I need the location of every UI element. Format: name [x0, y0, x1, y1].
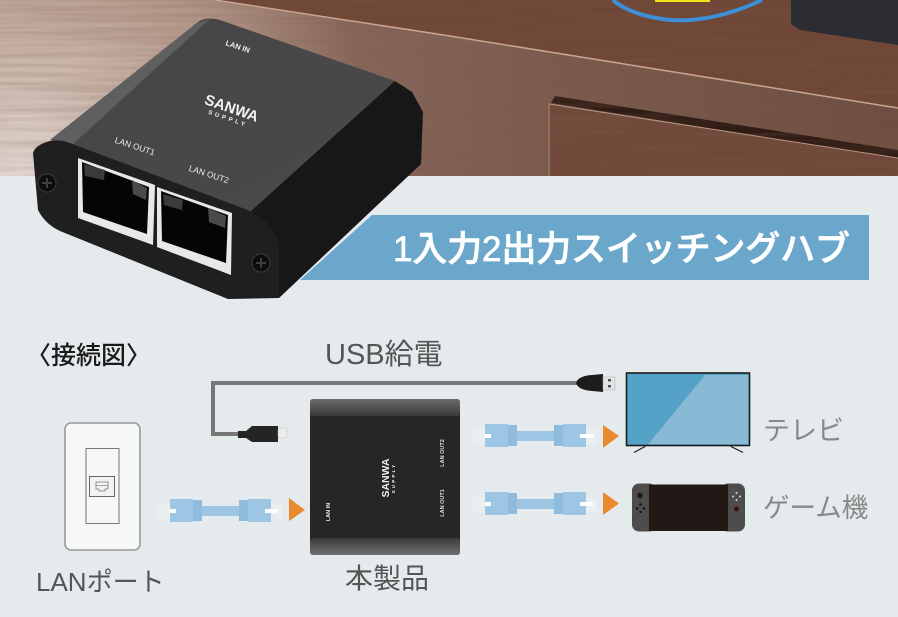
USB power cable — [213, 374, 615, 442]
printed label: LAN OUT1: LAN OUT1 — [440, 489, 446, 517]
icon: game console — [632, 484, 745, 532]
printed logo: SANWA SUPPLY: SUPPLY — [391, 463, 396, 493]
port 2 — [157, 187, 232, 275]
icon: TV — [626, 373, 750, 452]
product photo: switching hub — [33, 19, 423, 299]
printed logo: SANWA SUPPLY: SANWA — [380, 458, 392, 498]
arrow: to game console — [603, 492, 619, 515]
banner — [300, 215, 869, 280]
photo: wooden desk background — [0, 0, 898, 176]
heading: connection diagram: 〈接続図〉 — [26, 342, 151, 370]
arrow: to hub — [289, 498, 305, 521]
printed logo: SANWA SUPPLY: SUPPLY — [207, 110, 248, 129]
port 1 — [78, 158, 155, 245]
label: this product: 本製品 — [345, 563, 429, 594]
printed label: LAN OUT2: LAN OUT2 — [188, 163, 230, 185]
photo: yellow cable — [655, 0, 710, 2]
hub front face — [33, 140, 279, 299]
diagram product: hub top view — [310, 399, 460, 555]
label: TV: テレビ — [763, 416, 844, 446]
LAN cable: hub to TV — [472, 424, 597, 447]
icon: LAN wall port — [65, 423, 140, 550]
arrow: to TV — [603, 425, 619, 448]
printed label: LAN OUT2: LAN OUT2 — [440, 439, 446, 467]
LAN cable: port to hub — [157, 499, 282, 522]
hub top face — [50, 19, 395, 212]
banner title: 1入力2出力スイッチングハブ — [393, 230, 850, 269]
label: game console: ゲーム機 — [763, 493, 868, 523]
photo: black router — [791, 0, 898, 45]
USB-C plug — [238, 426, 287, 442]
hub right side — [246, 81, 423, 298]
printed label: LAN IN: LAN IN — [326, 503, 332, 521]
label: LAN port: LANポート — [36, 567, 165, 597]
screw left — [38, 174, 56, 192]
label: USB power: USB給電 — [325, 338, 443, 371]
printed label: LAN IN: LAN IN — [224, 38, 251, 55]
screw right — [252, 254, 270, 272]
printed logo: SANWA SUPPLY: SANWA — [202, 91, 261, 126]
photo: blue cable — [613, 0, 762, 20]
printed label: LAN OUT1: LAN OUT1 — [114, 135, 156, 157]
LAN cable: hub to game console — [472, 492, 597, 515]
USB-A plug — [576, 374, 615, 392]
